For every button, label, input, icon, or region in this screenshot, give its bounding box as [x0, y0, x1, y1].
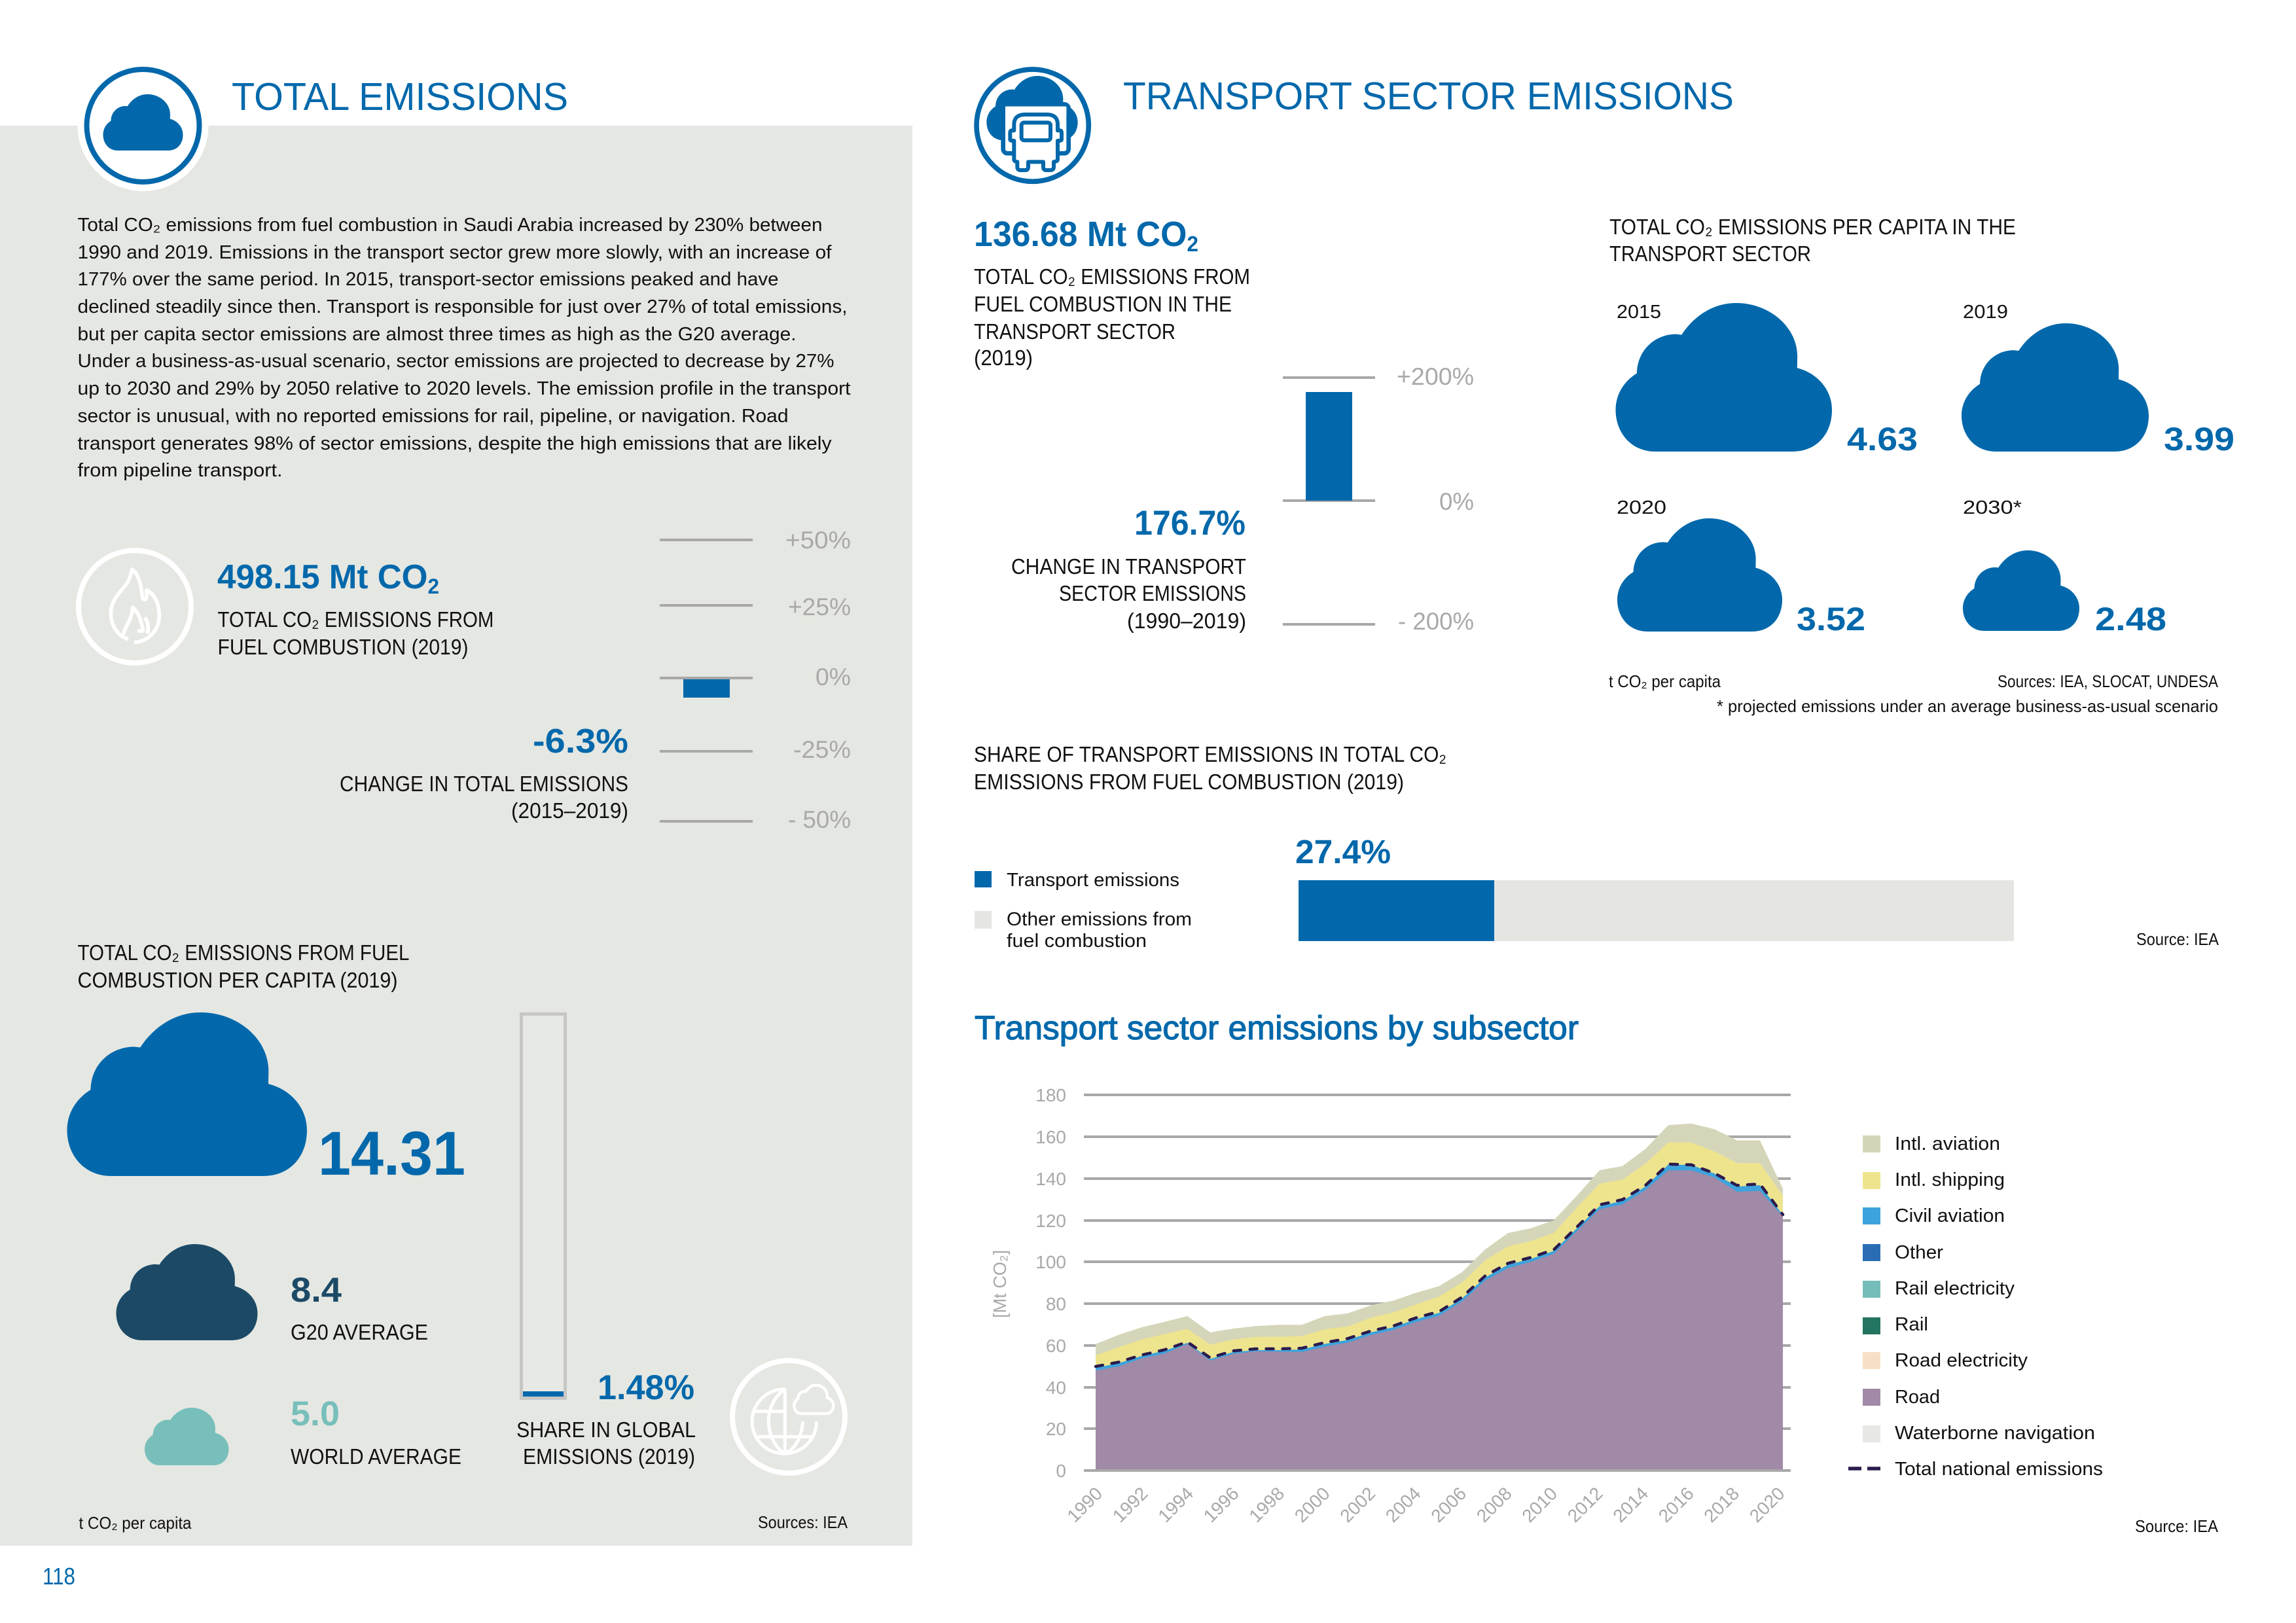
text block: introduction: declined steadily since then. Transport is responsible for just over 27% of total emissions, [77, 296, 847, 317]
axis: years: 2008 [1473, 1483, 1516, 1526]
text block: introduction: 177% over the same period. In 2015, transport-sector emissions peaked and have [77, 269, 779, 290]
heading: emissions per capita [77, 940, 410, 992]
axis: years: 2014 [1609, 1483, 1652, 1526]
icon: large cloud [67, 1012, 307, 1176]
cloud stat: 2015: 2015 [1617, 302, 1661, 323]
text block: total emissions label: TOTAL CO₂ EMISSIONS FROM [217, 607, 493, 632]
axis: years: 2004 [1382, 1483, 1425, 1526]
stat: world average: 5.0 [291, 1395, 340, 1433]
chart: emissions by subsector: 120 [1035, 1211, 1066, 1231]
line: total national emissions [1096, 1164, 1783, 1366]
legend: subsectors: Rail electricity [1895, 1278, 2015, 1299]
legend: share bar: Other emissions from [1007, 909, 1192, 930]
text block: introduction: up to 2030 and 29% by 2050 relative to 2020 levels. The emission profile in the transport [77, 378, 851, 399]
chart: emissions by subsector: 140 [1035, 1169, 1066, 1189]
cloud stat: 2019: 3.99 [2164, 421, 2234, 457]
axis: years [1063, 1483, 1789, 1526]
axis: years: 1998 [1245, 1483, 1288, 1526]
text block: introduction: from pipeline transport. [77, 460, 283, 481]
cloud stat: 2019: 2019 [1963, 302, 2008, 323]
panel: total emissions background [0, 126, 912, 1546]
cloud stat: 2020 [1617, 497, 1865, 637]
chart: emissions by subsector: 20 [1046, 1419, 1066, 1439]
stat: transport emissions value: 2 [1187, 232, 1198, 256]
axis: years: 1994 [1154, 1483, 1197, 1526]
text block: introduction: but per capita sector emissions are almost three times as high as the G20 average. [77, 324, 796, 345]
chart: emissions by subsector: 80 [1046, 1294, 1066, 1314]
axis: years: 2012 [1564, 1483, 1607, 1526]
area: road [1096, 1170, 1783, 1469]
cloud stat: 2030 [1963, 497, 2166, 637]
stat: total emissions value: 2 [427, 575, 439, 598]
chart: change in transport emissions: - 200% [1398, 608, 1474, 635]
text block: change label [340, 772, 628, 823]
chart: emissions by subsector: 40 [1046, 1378, 1066, 1398]
axis: years: 2018 [1700, 1483, 1743, 1526]
legend: subsectors [1848, 1133, 2103, 1480]
axis: years: 1990 [1063, 1483, 1106, 1526]
chart: change in total emissions: -25% [793, 736, 851, 763]
legend: subsectors: Road [1895, 1387, 1940, 1408]
stat: change in total emissions: -6.3% [533, 722, 628, 760]
chart: change in transport emissions: +200% [1397, 363, 1474, 390]
text block: introduction: sector is unusual, with no reported emissions for rail, pipeline, or navigation. Road [77, 406, 788, 427]
cloud stat: 2020: 3.52 [1797, 601, 1865, 637]
text block: introduction: 1990 and 2019. Emissions in the transport sector grew more slowly, with an increase of [77, 242, 832, 263]
text block: transport emissions label: (2019) [974, 346, 1033, 370]
heading: share of transport emissions [974, 742, 1446, 794]
text block: transport emissions label: TOTAL CO₂ EMISSIONS FROM [974, 264, 1250, 289]
axis: years: 2020 [1746, 1483, 1789, 1526]
icon: flame [79, 550, 191, 663]
legend: share bar: fuel combustion [1007, 931, 1147, 952]
stat: total emissions value: 498.15 Mt CO [217, 558, 431, 596]
text block: share label [516, 1418, 696, 1469]
title: transport sector emissions: TRANSPORT SECTOR EMISSIONS [1123, 75, 1734, 118]
chart: emissions by subsector: 160 [1035, 1127, 1066, 1147]
text block: transport change label [1011, 554, 1246, 633]
stat: 27.4% share: 27.4% [1295, 833, 1391, 870]
chart: emissions by subsector: 60 [1046, 1336, 1066, 1356]
axis: years: 1996 [1200, 1483, 1243, 1526]
axis: years: 2006 [1427, 1483, 1470, 1526]
text block: total emissions label: FUEL COMBUSTION (2019) [217, 635, 469, 659]
chart: share in global emissions bar [521, 1014, 565, 1398]
legend: subsectors: Other [1895, 1242, 1943, 1263]
legend: subsectors: Waterborne navigation [1895, 1423, 2095, 1444]
chart: change in transport emissions: 0% [1439, 488, 1474, 515]
legend: subsectors: Road electricity [1895, 1350, 2028, 1371]
area: international shipping [1096, 1143, 1783, 1469]
text block: transport emissions label: TRANSPORT SECTOR [974, 319, 1175, 344]
chart: change in total emissions: +25% [788, 594, 851, 620]
stat: G20 average [291, 1271, 428, 1344]
axis: years: 2002 [1336, 1483, 1379, 1526]
heading: share of transport emissions: SHARE OF TRANSPORT EMISSIONS IN TOTAL CO₂ [974, 742, 1446, 766]
stat: per capita value: 14.31 [318, 1119, 465, 1188]
icon: truck in cloud [977, 69, 1088, 181]
axis: years: 2000 [1291, 1483, 1334, 1526]
icon: cloud in circle [77, 60, 208, 191]
cloud stat: 2030: 2.48 [2095, 601, 2166, 637]
legend: share bar [975, 870, 1192, 952]
text block: transport emissions label: FUEL COMBUSTION IN THE [974, 292, 1232, 316]
text block: introduction [77, 215, 851, 481]
text block: change label: CHANGE IN TOTAL EMISSIONS [340, 772, 628, 796]
cloud stat: 2019 [1962, 302, 2234, 457]
source note: Source: IEA [2135, 1516, 2219, 1536]
cloud stat: 2030: 2030* [1963, 497, 2022, 518]
title: total emissions: TOTAL EMISSIONS [232, 75, 568, 118]
chart: emissions by subsector: [Mt CO₂] [990, 1250, 1010, 1318]
stat: change in transport emissions: 176.7% [1134, 504, 1246, 543]
heading: emissions per capita: TOTAL CO₂ EMISSIONS FROM FUEL [77, 940, 410, 965]
chart: emissions by subsector: 180 [1035, 1085, 1066, 1105]
text block: total emissions label [217, 607, 493, 659]
cloud stat: 2020: 2020 [1617, 497, 1666, 518]
stat: share in global emissions: 1.48% [598, 1368, 694, 1407]
heading: per capita transport: TRANSPORT SECTOR [1609, 241, 1811, 266]
notes: per capita units and sources: Sources: IEA, SLOCAT, UNDESA [1998, 671, 2219, 691]
legend: subsectors: Civil aviation [1895, 1205, 2005, 1226]
chart: emissions by subsector: 100 [1035, 1252, 1066, 1272]
chart: share bar [1299, 880, 2014, 941]
heading: emissions per capita: COMBUSTION PER CAPITA (2019) [77, 968, 398, 992]
text block: transport emissions label [974, 264, 1250, 370]
stat: world average: WORLD AVERAGE [291, 1444, 461, 1469]
text block: transport change label: CHANGE IN TRANSPORT [1011, 554, 1246, 579]
cloud stat: 2015 [1615, 302, 1918, 457]
area: international aviation [1096, 1124, 1783, 1469]
icon: G20 cloud [117, 1244, 258, 1340]
stat: world average [291, 1395, 461, 1469]
notes: per capita units and sources [1609, 671, 2219, 716]
stat: transport emissions value: 136.68 Mt CO [974, 215, 1196, 254]
heading: share of transport emissions: EMISSIONS FROM FUEL COMBUSTION (2019) [974, 770, 1404, 794]
axis: years: 1992 [1109, 1483, 1152, 1526]
cloud stat: 2015: 4.63 [1847, 421, 1918, 457]
heading: per capita transport: TOTAL CO₂ EMISSIONS PER CAPITA IN THE [1609, 215, 2016, 239]
stat: G20 average: 8.4 [291, 1271, 342, 1310]
legend: subsectors: Intl. aviation [1895, 1133, 2000, 1154]
text block: share label: EMISSIONS (2019) [523, 1444, 695, 1469]
text block: share label: SHARE IN GLOBAL [516, 1418, 696, 1442]
text block: transport change label: (1990–2019) [1127, 609, 1246, 633]
stat: G20 average: G20 AVERAGE [291, 1320, 428, 1344]
heading: subsector chart: Transport sector emissions by subsector [975, 1009, 1579, 1046]
icon: world cloud [145, 1408, 229, 1465]
source note: Sources: IEA [758, 1512, 848, 1532]
text block: introduction: Under a business-as-usual scenario, sector emissions are projected to decrease by 27% [77, 351, 834, 372]
chart: change in total emissions: +50% [785, 527, 851, 554]
text block: transport change label: SECTOR EMISSIONS [1059, 581, 1246, 605]
text block: introduction: Total CO₂ emissions from fuel combustion in Saudi Arabia increased by 230% between [77, 215, 822, 236]
axis: years: 2010 [1518, 1483, 1561, 1526]
unit note: t CO₂ per capita [79, 1513, 192, 1533]
chart: change in total emissions [660, 527, 851, 833]
chart: emissions by subsector [990, 1085, 1791, 1526]
heading: per capita transport [1609, 215, 2016, 266]
page number: 118 [43, 1563, 75, 1590]
chart: change in total emissions: - 50% [788, 806, 851, 833]
text block: introduction: transport generates 98% of sector emissions, despite the high emissions that are likely [77, 433, 832, 454]
chart: change in total emissions: 0% [816, 664, 851, 690]
axis: years: 2016 [1655, 1483, 1698, 1526]
icon: globe and cloud [732, 1361, 845, 1473]
text block: change label: (2015–2019) [511, 798, 628, 823]
notes: per capita units and sources: t CO₂ per capita [1609, 671, 1721, 691]
legend: subsectors: Rail [1895, 1314, 1928, 1335]
area: civil aviation [1096, 1165, 1783, 1469]
chart: emissions by subsector: 0 [1056, 1461, 1066, 1481]
legend: share bar: Transport emissions [1007, 870, 1179, 891]
notes: per capita units and sources: * projected emissions under an average business-as-usual scenario [1717, 696, 2218, 716]
chart: change in transport emissions [1283, 363, 1474, 635]
legend: subsectors: Total national emissions [1895, 1459, 2103, 1480]
legend: subsectors: Intl. shipping [1895, 1169, 2005, 1190]
source note: Source: IEA [2136, 929, 2219, 949]
